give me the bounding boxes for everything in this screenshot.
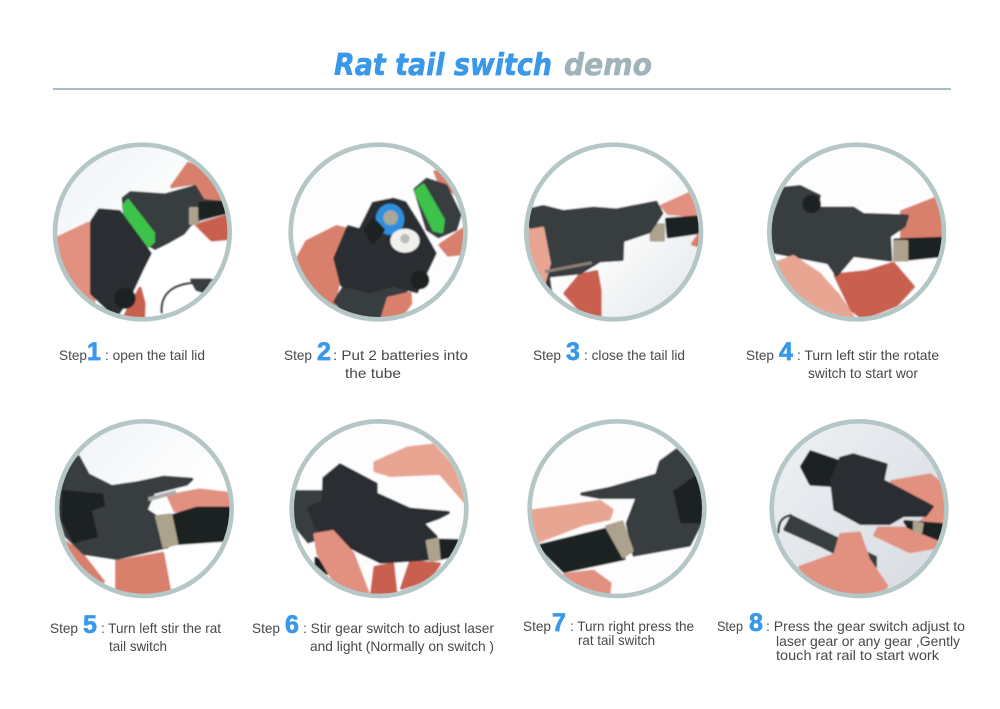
step 8 photo circle [768, 418, 955, 605]
step 2 caption: Step [284, 347, 312, 363]
step 2 caption: the tube [345, 365, 401, 381]
step 1 caption [59, 338, 205, 366]
title: Rat tail switch [334, 48, 552, 83]
step 8 caption [717, 609, 965, 663]
step 1 caption: 1 [87, 338, 101, 366]
step 3 caption: Step [533, 347, 561, 363]
step 7 caption: Step [523, 618, 551, 634]
step 7 caption: : Turn right press the [570, 618, 694, 634]
step 1 photo circle [50, 140, 237, 327]
step 1 caption: Step [59, 347, 87, 363]
step 7 photo circle [527, 418, 713, 605]
step 8 caption: 8 [749, 609, 763, 637]
step 3 caption: 3 [566, 338, 580, 366]
step 5 caption [50, 611, 221, 654]
step 7 caption: 7 [552, 609, 566, 637]
step 5 caption: 5 [83, 611, 97, 639]
step 1 caption: : open the tail lid [105, 347, 205, 363]
step 3 caption: : close the tail lid [584, 347, 685, 363]
step 3 photo circle [523, 140, 710, 327]
step 8 caption: Step [717, 618, 743, 634]
step 4 caption [746, 338, 939, 381]
step 2 photo circle [287, 140, 473, 327]
step 4 photo circle [767, 140, 953, 327]
step 5 caption: Step [50, 620, 78, 636]
step 7 caption: rat tail switch [578, 632, 655, 648]
step 6 caption: and light (Normally on switch ) [310, 638, 494, 654]
step 5 caption: : Turn left stir the rat [101, 620, 221, 636]
step 2 caption: : Put 2 batteries into [333, 347, 468, 363]
step 5 caption: tail switch [109, 638, 167, 654]
step 8 caption: laser gear or any gear ,Gently [776, 633, 960, 649]
step 6 caption: : Stir gear switch to adjust laser [303, 620, 494, 636]
step 3 caption [533, 338, 685, 366]
step 4 caption: switch to start wor [808, 365, 918, 381]
step 6 caption: Step [252, 620, 280, 636]
step 8 caption: touch rat rail to start work [776, 647, 940, 663]
step 8 caption: : Press the gear switch adjust to [766, 618, 965, 634]
step 4 caption: : Turn left stir the rotate [797, 347, 939, 363]
step 6 caption [252, 611, 494, 654]
step 4 caption: 4 [779, 338, 793, 366]
step 2 caption [284, 338, 468, 381]
step 4 caption: Step [746, 347, 774, 363]
step 6 photo circle [288, 418, 475, 605]
step 5 photo circle [53, 418, 240, 605]
step 7 caption [523, 609, 694, 648]
title: demo [564, 48, 652, 83]
step 6 caption: 6 [285, 611, 299, 639]
step 2 caption: 2 [317, 338, 331, 366]
